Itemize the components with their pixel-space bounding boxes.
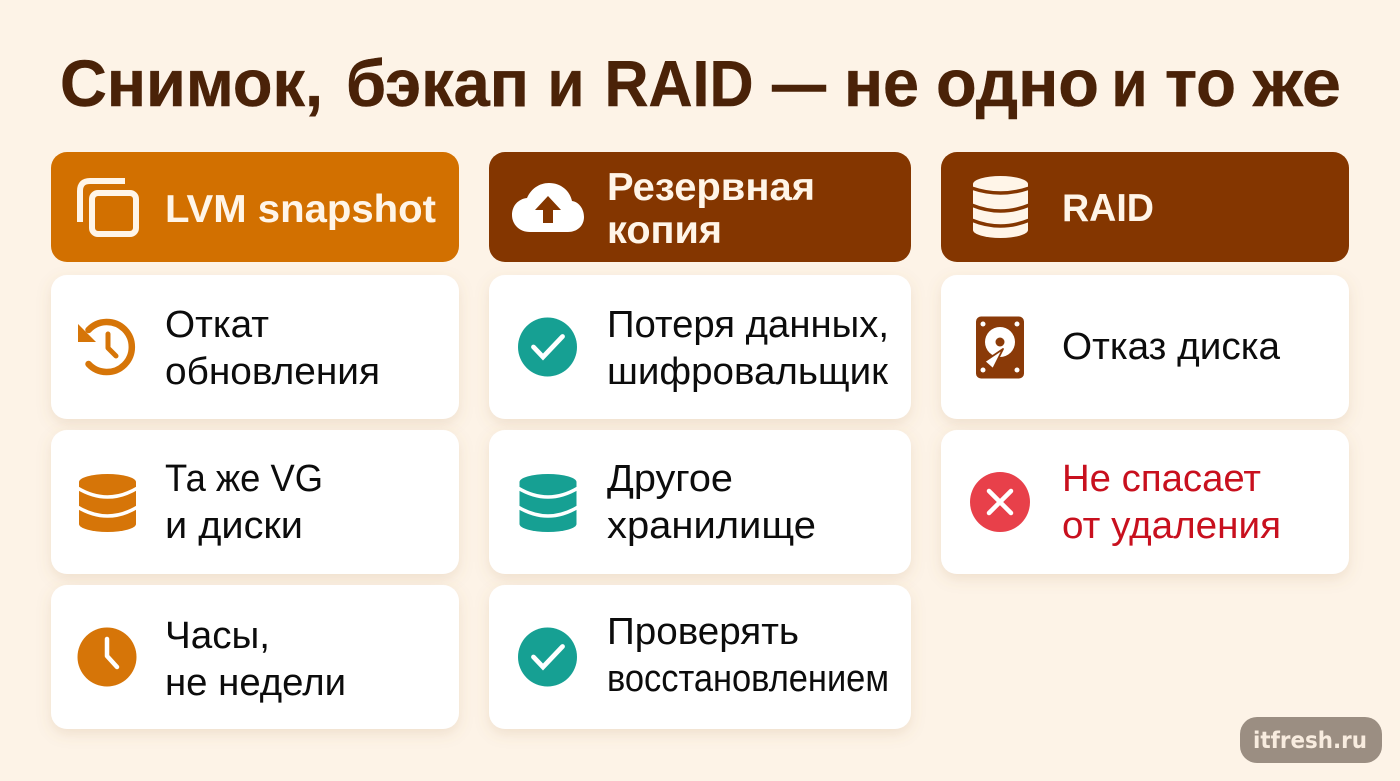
title: не: [844, 46, 919, 120]
text: Отказ диска: [1062, 326, 1281, 368]
icon: database: [78, 474, 138, 532]
icon: database: [518, 474, 578, 532]
title: —: [772, 46, 826, 120]
icon: red cross: [970, 472, 1030, 532]
text: Не спасает: [1062, 458, 1261, 500]
text: Откат: [165, 304, 269, 346]
card: data loss: [489, 275, 911, 419]
card: data loss: шифровальщик: [607, 351, 888, 393]
panel: backup column: [489, 152, 911, 729]
card: other storage: хранилище: [607, 505, 816, 547]
title: и: [1112, 46, 1148, 120]
icon: clock: [78, 628, 136, 686]
card: other storage: [489, 430, 911, 574]
title: бэкап: [346, 46, 529, 120]
text: Проверять: [607, 611, 799, 653]
card: disk failure: [941, 275, 1349, 419]
header: RAID: [941, 152, 1349, 262]
header: LVM snapshot: [51, 152, 459, 262]
header: backup: [489, 152, 911, 262]
card: hours: [51, 585, 459, 729]
card: verify: [489, 585, 911, 729]
text: Потеря данных,: [607, 304, 889, 346]
icon: history clock: [78, 322, 132, 372]
icon: hard drive: [976, 316, 1024, 378]
header label: RAID: [1062, 187, 1154, 230]
text: Другое: [607, 458, 733, 500]
title: и: [548, 46, 584, 120]
card: same VG: и диски: [165, 505, 303, 547]
card: rollback: [51, 275, 459, 419]
header label: Резервная: [607, 166, 815, 209]
icon: copy layers: [80, 181, 136, 234]
title: Снимок,: [60, 46, 323, 120]
card: no deletion protection: [941, 430, 1349, 574]
panel: RAID column: [941, 152, 1349, 574]
panel: LVM snapshot column: [51, 152, 459, 729]
card: rollback: обновления: [165, 351, 380, 393]
card: hours: не недели: [165, 662, 346, 704]
watermark badge: [1240, 717, 1382, 763]
text: Часы,: [165, 615, 270, 657]
header: backup: копия: [607, 209, 722, 252]
title: [60, 46, 1341, 120]
card: verify: восстановлением: [607, 658, 889, 700]
card: same VG: [51, 430, 459, 574]
icon: check: [518, 628, 577, 686]
title: RAID: [604, 48, 754, 120]
watermark badge: itfresh.ru: [1253, 728, 1367, 754]
title: то: [1165, 46, 1236, 120]
title: одно: [936, 46, 1099, 120]
card: no deletion protection: от удаления: [1062, 505, 1281, 547]
text: Та же VG: [165, 458, 323, 500]
header label: LVM snapshot: [165, 188, 436, 231]
icon: check: [518, 318, 577, 376]
icon: cloud upload: [512, 183, 584, 232]
title: же: [1252, 46, 1341, 120]
icon: database: [972, 176, 1030, 238]
